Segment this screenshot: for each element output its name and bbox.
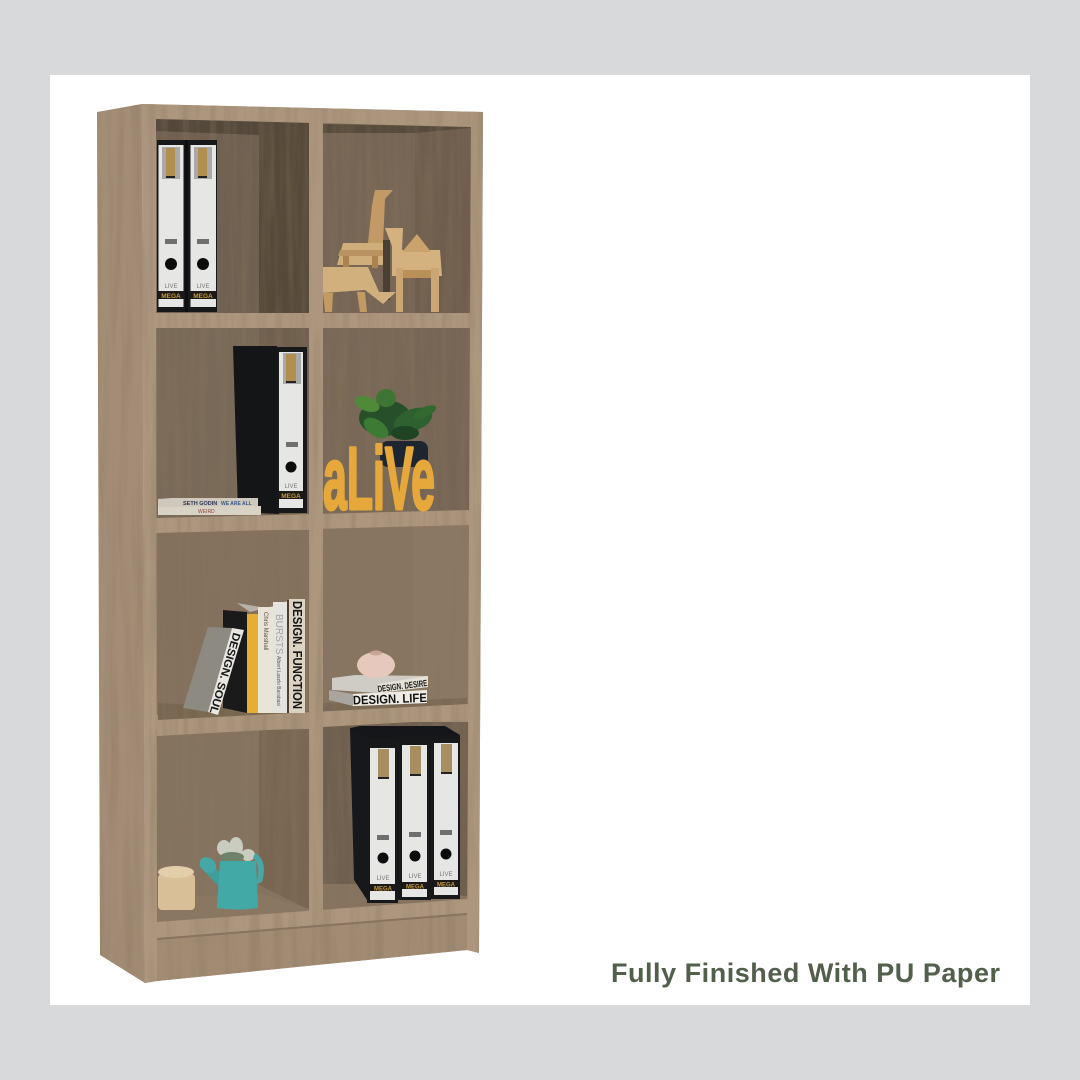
book: design desire: DESIGN. DESIRE — [377, 678, 428, 694]
wood grain texture — [90, 100, 490, 990]
jar — [158, 866, 195, 910]
cell: row 2 left — [156, 328, 309, 520]
binder C: LIVE — [439, 872, 453, 878]
bookcase — [90, 100, 490, 990]
stacked books: second shelf: WE ARE ALL — [221, 501, 252, 507]
book row: third shelf — [183, 599, 305, 715]
page tops — [237, 599, 305, 612]
cell: row 4 left — [156, 729, 309, 930]
binder tops — [350, 726, 460, 746]
binder 2: MEGA — [193, 293, 213, 300]
black book — [223, 610, 247, 713]
binder A: MEGA — [374, 886, 393, 892]
cell: row 3 left — [156, 530, 309, 722]
infographic canvas — [50, 75, 1030, 1005]
binder B — [398, 736, 431, 900]
stacked books: second shelf: SETH GODIN — [183, 501, 217, 507]
infographic canvas: aLiVe — [323, 428, 435, 528]
binder leaning: second shelf: MEGA — [281, 493, 301, 500]
binder A: LIVE — [376, 876, 390, 882]
caption: Fully Finished With PU Paper — [611, 958, 1000, 988]
binder C — [431, 735, 460, 899]
front frame — [142, 104, 483, 983]
cell: row 1 right — [323, 122, 471, 313]
binder 2 — [185, 140, 217, 312]
white book: Chris Marshall — [262, 612, 268, 650]
cell: row 4 right — [323, 722, 471, 912]
bursts book — [273, 602, 287, 713]
binder leaning: second shelf — [233, 346, 307, 514]
book: design life: DESIGN. LIFE — [353, 691, 427, 707]
bursts book: Albert Laszlo Barabasi — [275, 656, 281, 706]
binder leaning: second shelf: LIVE — [284, 484, 298, 490]
design function book: DESIGN. FUNCTION — [290, 601, 304, 709]
bookcase backing — [142, 104, 483, 983]
panel: white product card — [50, 75, 1030, 1005]
cell: row 2 right — [323, 328, 471, 518]
origami camel — [383, 228, 442, 312]
cell: row 1 left — [156, 119, 309, 313]
binder 1: LIVE — [164, 284, 178, 290]
binder 1: MEGA — [161, 293, 181, 300]
origami giraffe — [337, 190, 393, 268]
bursts book: BURSTS — [273, 614, 284, 655]
pink vase — [357, 650, 395, 678]
stacked books: second shelf — [158, 498, 261, 515]
vase and two books: third shelf right — [329, 650, 428, 707]
plant in watering can — [197, 837, 264, 910]
binder pair: top left shelf — [157, 140, 217, 312]
binder A — [367, 738, 398, 903]
plant in dark pot — [352, 389, 438, 467]
binder C: MEGA — [437, 882, 456, 888]
binder B: MEGA — [406, 884, 425, 890]
cell: row 3 right — [323, 525, 471, 712]
flowers — [217, 837, 255, 862]
side panel of bookcase — [97, 104, 145, 983]
origami wooden animals — [323, 190, 442, 312]
teal can — [253, 853, 264, 884]
origami small animal — [323, 267, 396, 312]
yellow book — [247, 614, 258, 713]
leaning book: DESIGN. SOUL — [207, 631, 242, 715]
binder 2: LIVE — [196, 284, 210, 290]
three binders: bottom shelf — [350, 726, 460, 903]
binder 1 — [157, 140, 185, 312]
binder B: LIVE — [408, 874, 422, 880]
stacked books: second shelf: WEIRD — [198, 509, 215, 515]
